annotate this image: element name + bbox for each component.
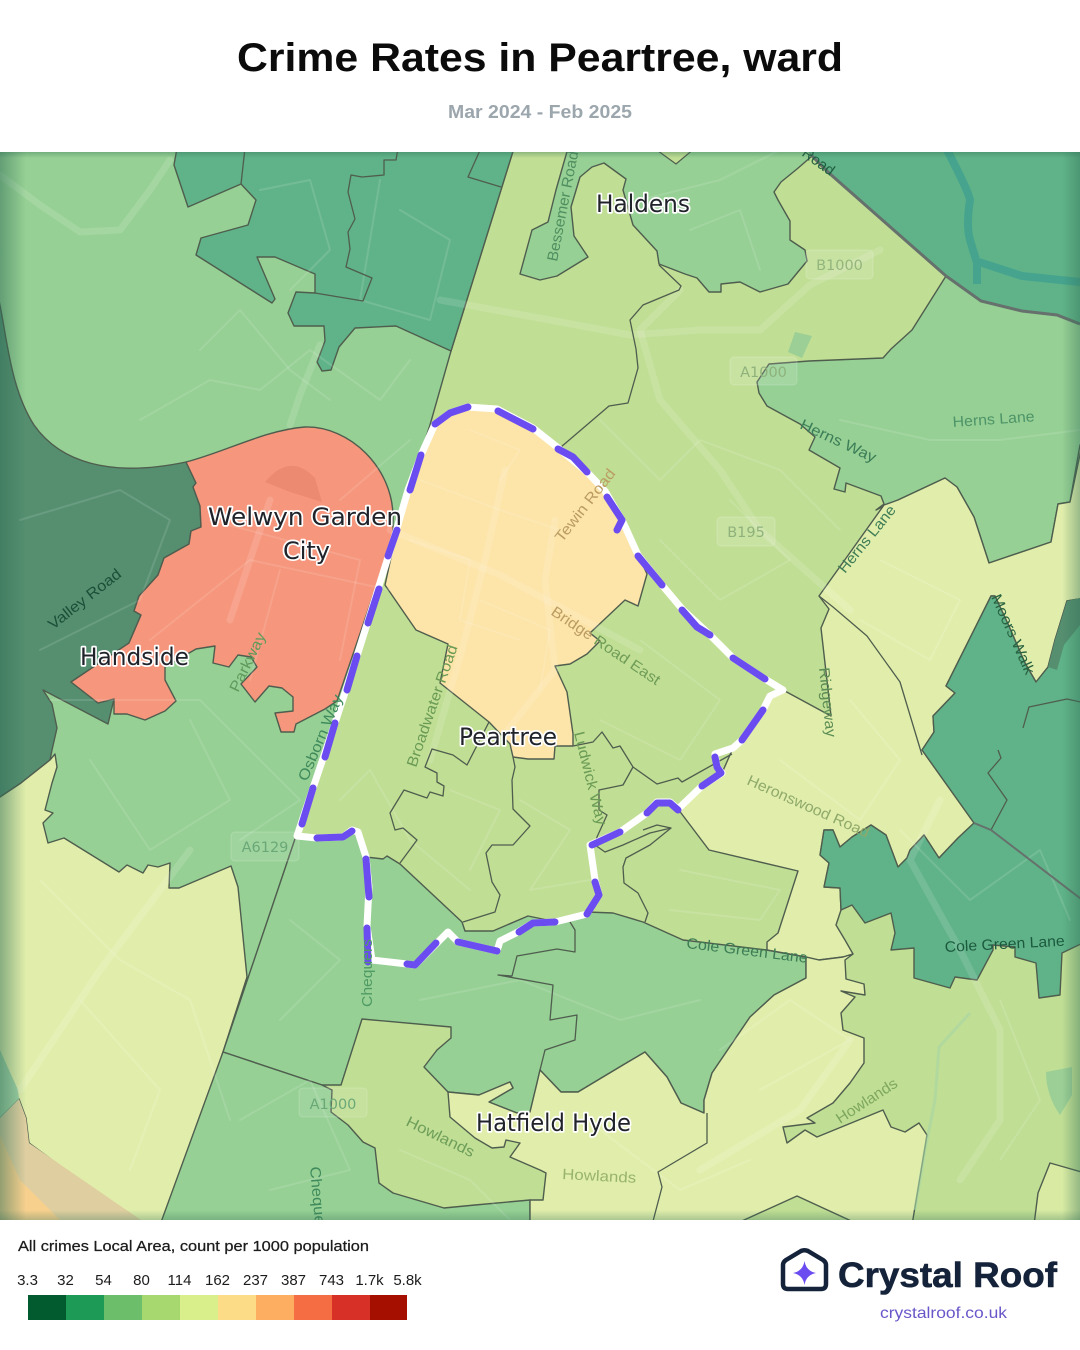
brand logo: [783, 1250, 1057, 1322]
road names: Ridgeway: [815, 667, 839, 739]
road names: Cole Green Lane: [686, 935, 809, 967]
legend scale labels: 54: [95, 1272, 112, 1289]
place: Welwyn Garden City: Welwyn Garden: [208, 503, 402, 531]
legend scale labels: 162: [205, 1272, 230, 1289]
ward boundary: Peartree white outline: [297, 407, 783, 965]
region: dark green east: [820, 596, 1080, 998]
shield: B1000: [806, 250, 873, 279]
region: north-east darker green: [805, 148, 1080, 324]
place: Handside: Handside: [80, 643, 189, 671]
road names: Bessemer Road: [544, 150, 582, 263]
shield: B1000: B1000: [816, 258, 863, 274]
shield: A1000 south: [299, 1088, 367, 1117]
title: Crime Rates in Peartree, ward: [237, 36, 843, 80]
north-east boundary line: [812, 156, 1080, 324]
river: [946, 148, 1080, 284]
place: Hatfield Hyde: Hatfield Hyde: [476, 1109, 631, 1137]
region: sand corner: [0, 1099, 141, 1220]
place: Peartree: Peartree: [459, 723, 557, 751]
region: pale south: [448, 954, 927, 1225]
region: west mid green: [0, 152, 514, 977]
legend title: All crimes Local Area, count per 1000 population: [18, 1239, 369, 1255]
region: Peartree peach: [385, 407, 647, 759]
region: darkest west: [0, 292, 201, 799]
ward boundary: purple dashes: [302, 407, 765, 965]
road names: [45, 144, 1065, 1239]
shield: A1000 north: A1000: [740, 365, 787, 381]
brand name: Crystal Roof: [838, 1256, 1057, 1295]
region: pale west: [0, 754, 247, 1225]
road shields: [231, 250, 873, 1117]
road names: Moors Walk: [987, 592, 1038, 678]
water: pond and lake: [788, 332, 1072, 1210]
legend scale labels: 114: [168, 1272, 191, 1289]
road names: Tewin Road: [552, 466, 619, 545]
region: pale east: [678, 445, 1080, 960]
legend scale labels: 237: [243, 1272, 268, 1289]
road network: [0, 150, 1080, 1220]
road names: Parkway: [226, 629, 270, 695]
website url: crystalroof.co.uk: [880, 1305, 1008, 1322]
subtitle: date range: Mar 2024 - Feb 2025: [448, 102, 632, 122]
place names: [80, 190, 690, 1137]
shield: B195: B195: [727, 525, 765, 541]
teal edge: [0, 1050, 19, 1118]
region: mid green bottom: [160, 1052, 530, 1225]
region: pale bottom right: [1034, 1163, 1080, 1225]
icon: house with star: [783, 1250, 826, 1289]
road names: Howlands: [833, 1075, 901, 1127]
road names: Chequers: [306, 1166, 329, 1239]
sand corner orange: [0, 1135, 60, 1220]
region: dark sliver east: [1048, 598, 1080, 670]
road names: Chequers: [359, 939, 376, 1007]
road names: Cole Green Lane: [944, 933, 1065, 956]
road names: Heronswood Road: [744, 772, 872, 841]
legend colour scale: [28, 1295, 407, 1320]
legend scale labels: 743: [319, 1272, 344, 1289]
region: north darker green: [174, 148, 514, 371]
road names: Herns Lane: [952, 408, 1035, 431]
shield: A1000 south: A1000: [310, 1097, 356, 1113]
road names: Ludwick Way: [570, 730, 610, 828]
legend scale labels: 1.7k: [355, 1272, 384, 1289]
legend: [17, 1239, 422, 1320]
shield: A6129: [231, 832, 299, 861]
legend scale labels: [17, 1272, 422, 1289]
region: mid green south: [223, 830, 806, 1113]
shield: B195: [717, 517, 775, 546]
road names: Road: [799, 144, 838, 179]
region: high crime orange, town centre: [71, 427, 393, 732]
legend scale labels: 80: [133, 1272, 150, 1289]
legend scale labels: 3.3: [17, 1272, 38, 1289]
place: City: City: [283, 537, 330, 565]
region: dark box on west edge: [0, 802, 7, 815]
inner ward boundary lines: [241, 148, 1080, 1225]
road names: Osborn Way: [295, 692, 347, 784]
region: Herns mid green: [757, 276, 1080, 563]
place: Haldens: Haldens: [596, 190, 690, 218]
road names: Broadwater Road: [404, 643, 461, 769]
legend scale labels: 32: [57, 1272, 74, 1289]
legend scale labels: 5.8k: [393, 1272, 422, 1289]
road names: Bridge Road East: [548, 603, 664, 689]
region: Haldens mid green: [520, 148, 812, 292]
shield: A6129: A6129: [242, 840, 288, 856]
road names: Herns Lane: [835, 502, 900, 577]
shield: A1000 north: [730, 357, 797, 385]
road names: Howlands: [403, 1113, 477, 1161]
legend scale labels: 387: [281, 1272, 306, 1289]
road names: Valley Road: [45, 566, 125, 633]
top patch: [658, 152, 691, 165]
road names: Herns Way: [797, 416, 879, 467]
orange park patch: [265, 466, 322, 502]
road names: Howlands: [562, 1166, 637, 1187]
